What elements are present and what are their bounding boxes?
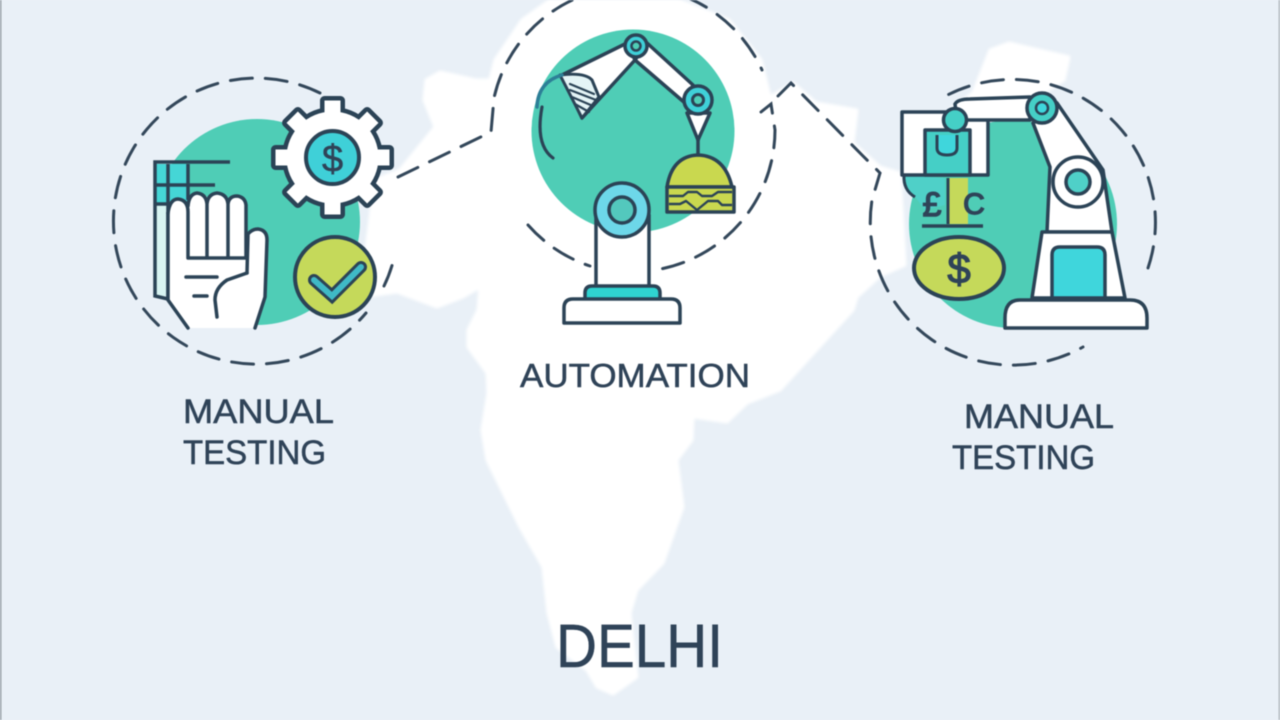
label: manual testing right: TESTING xyxy=(952,439,1095,477)
label: automation: AUTOMATION xyxy=(520,357,750,394)
currency symbols xyxy=(923,186,985,224)
dashed ring left xyxy=(113,78,393,364)
panel: manual testing right xyxy=(778,79,1155,477)
icon: dollar coin xyxy=(914,237,1004,299)
map of India xyxy=(360,0,1069,694)
label: manual testing right xyxy=(952,398,1114,477)
dashed connector and ring centre xyxy=(398,0,775,270)
icon: dollar coin: $ xyxy=(947,245,971,292)
icon: robot arm xyxy=(537,35,712,158)
icon: gear with dollar xyxy=(276,100,390,214)
label: manual testing left: TESTING xyxy=(183,434,326,472)
teal circle centre xyxy=(532,30,734,232)
panel: automation centre xyxy=(398,0,775,394)
teal circle left xyxy=(154,119,360,325)
currency symbols: C xyxy=(963,188,985,221)
icon: gear with dollar: $ xyxy=(322,138,343,180)
icon: hand xyxy=(168,193,267,328)
dashed connector and ring right xyxy=(778,79,1155,365)
teal circle right xyxy=(909,120,1117,328)
icon: large robot arm xyxy=(944,93,1147,328)
label: manual testing left: MANUAL xyxy=(183,393,334,431)
label: manual testing left xyxy=(183,393,334,472)
panel: manual testing left xyxy=(113,78,393,472)
icon: robot base xyxy=(564,183,680,323)
icon: document xyxy=(155,162,230,299)
icon: hanging dome xyxy=(667,155,734,212)
icon: check badge xyxy=(295,237,375,317)
currency symbols: £ xyxy=(923,186,942,224)
icon: currency machine xyxy=(902,112,988,226)
label: manual testing right: MANUAL xyxy=(964,398,1114,436)
title: Delhi: DELHI xyxy=(556,612,723,680)
